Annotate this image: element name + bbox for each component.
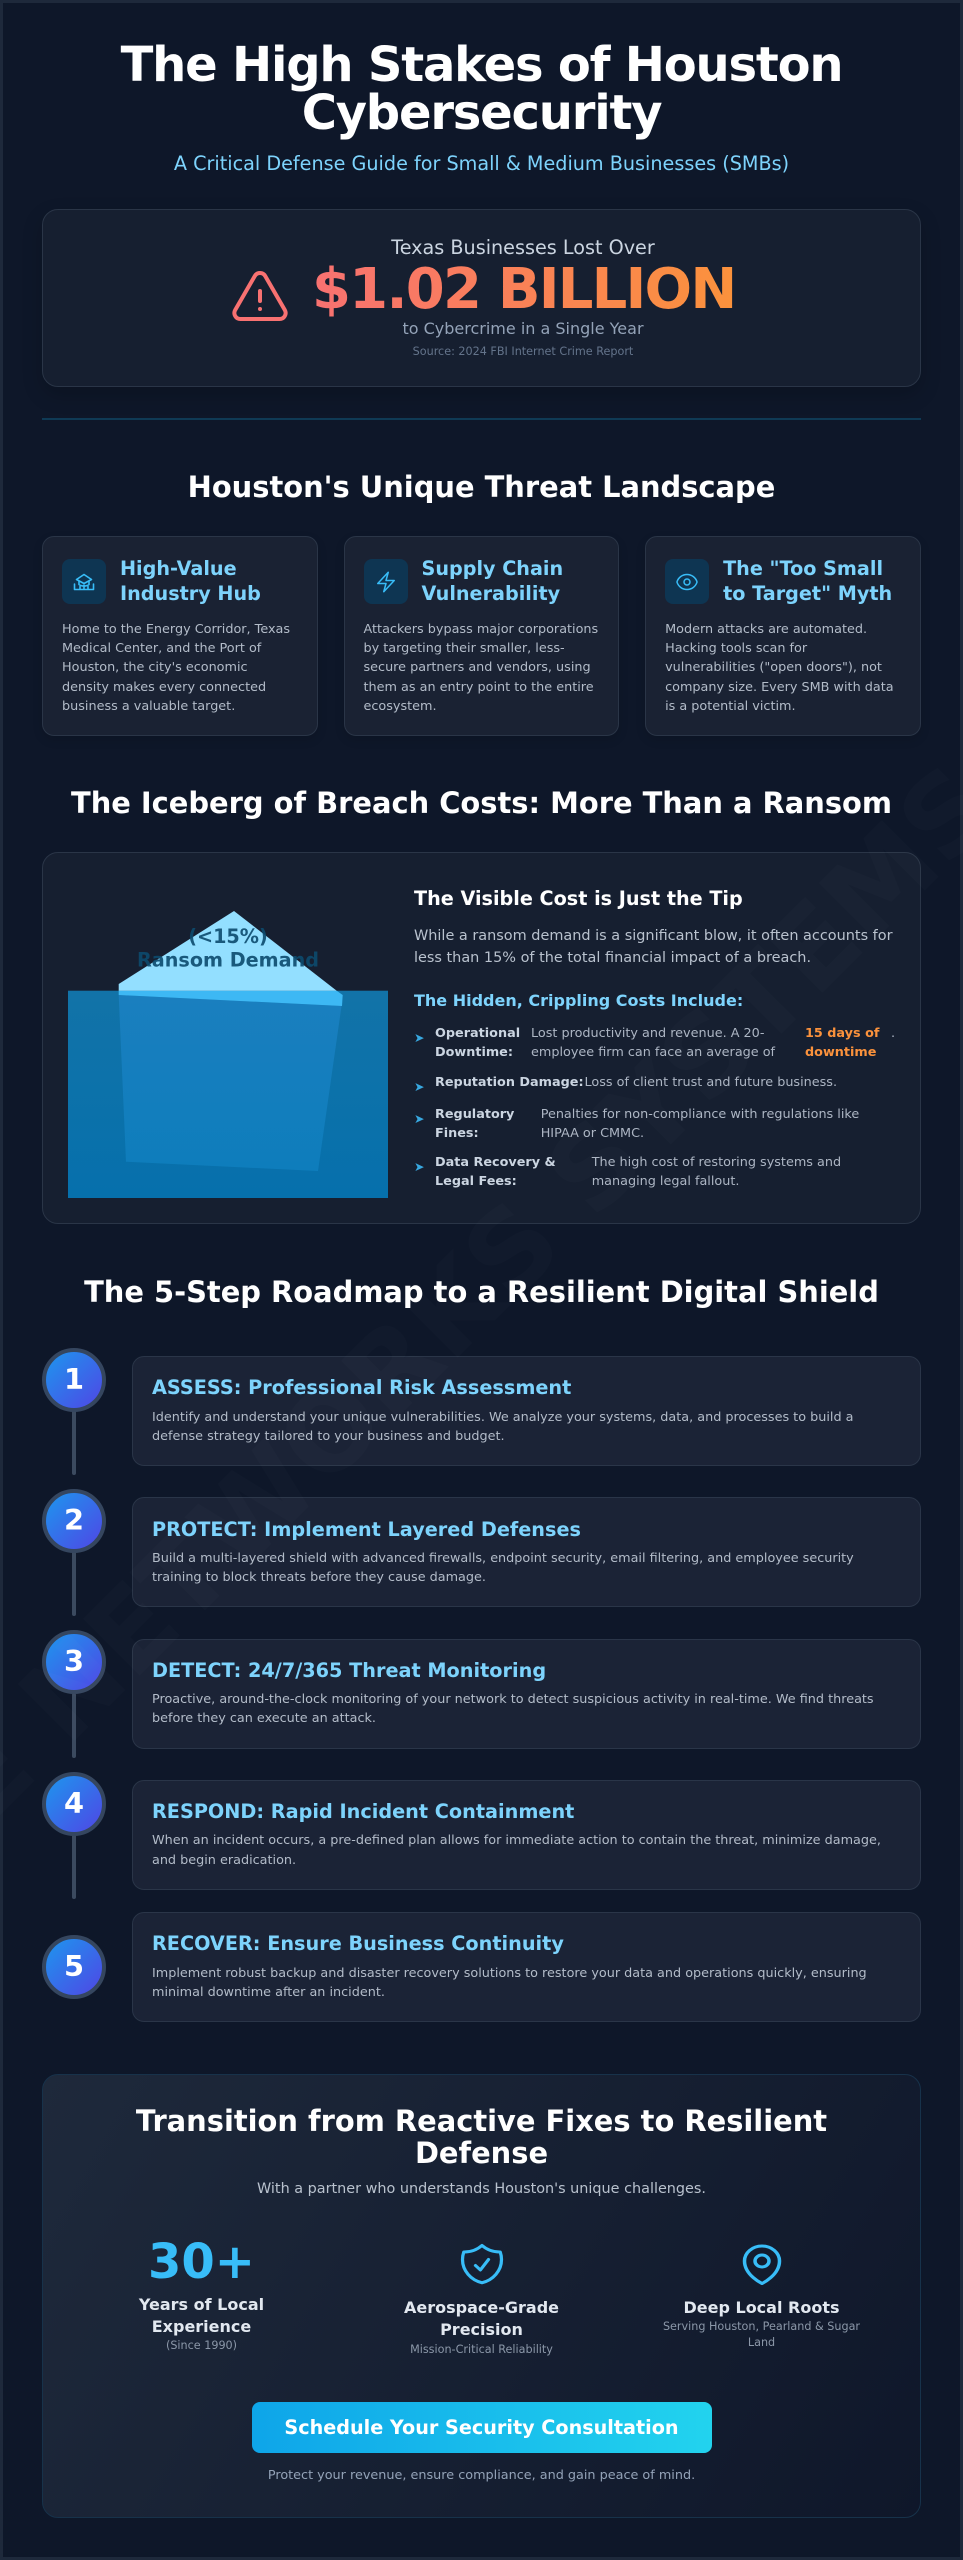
step 3 marker xyxy=(42,1630,106,1694)
card text: is a potential victim. xyxy=(665,699,796,714)
list item: regulatory fines xyxy=(414,1107,859,1141)
list item: operational downtime: downtime xyxy=(805,1045,876,1060)
list item: reputation damage xyxy=(414,1075,837,1094)
card title: to Target" Myth xyxy=(723,582,892,605)
list item: operational downtime: Downtime: xyxy=(435,1045,513,1060)
text: visible cost explanation: less than 15% of the total financial impact of a breach. xyxy=(414,950,811,966)
list item: regulatory fines: HIPAA or CMMC. xyxy=(541,1126,644,1141)
step 3 text xyxy=(152,1692,874,1726)
chart: iceberg diagram: Ransom Demand xyxy=(137,949,319,972)
card title: The "Too Small xyxy=(723,557,883,580)
list item: reputation damage: Loss of client trust and future business. xyxy=(584,1075,837,1090)
CTA heading xyxy=(136,2104,827,2170)
list item: data recovery: Legal Fees: xyxy=(435,1174,517,1189)
card text: Hacking tools scan for xyxy=(665,641,807,656)
step 5 card xyxy=(132,1912,921,2022)
list item: operational downtime: employee firm can face an average of xyxy=(531,1045,775,1060)
step 1 card xyxy=(132,1356,921,1466)
note: Mission-Critical Reliability xyxy=(410,2343,553,2356)
chart: iceberg diagram: (<15%) xyxy=(188,925,268,948)
step 2 text xyxy=(152,1551,854,1585)
card text: Attackers bypass major corporations xyxy=(364,622,598,637)
list item: operational downtime: 15 days of xyxy=(805,1026,879,1041)
step 5 marker: 5 xyxy=(64,1949,84,1983)
card text: company size. Every SMB with data xyxy=(665,680,894,695)
step 1 title: ASSESS: Professional Risk Assessment xyxy=(152,1376,571,1399)
panel: call to action xyxy=(42,2074,921,2518)
step 5 text xyxy=(152,1966,867,2000)
card text: secure partners and vendors, using xyxy=(364,660,591,675)
button: schedule consultation: Schedule Your Security Consultation xyxy=(284,2416,679,2439)
step 4 text xyxy=(152,1833,881,1868)
step 2 card xyxy=(132,1497,921,1607)
card text: ecosystem. xyxy=(364,699,437,714)
icon: bolt xyxy=(364,559,408,604)
stat caption: to Cybercrime in a Single Year xyxy=(402,318,644,338)
card title: High-Value xyxy=(120,557,237,580)
list item: data recovery: ➤ xyxy=(414,1159,424,1174)
list item: operational downtime: . xyxy=(891,1026,895,1041)
panel: too small to target myth xyxy=(645,536,921,736)
heading: iceberg: The Iceberg of Breach Costs: More Than a Ransom xyxy=(71,786,892,820)
title: The High Stakes of Houston xyxy=(121,37,842,93)
list item: data recovery: The high cost of restoring systems and xyxy=(592,1155,841,1170)
card title: Vulnerability xyxy=(422,582,560,605)
subheading: visible cost: The Visible Cost is Just the Tip xyxy=(414,887,743,910)
label xyxy=(138,2294,264,2336)
icon: map pin xyxy=(742,2244,782,2285)
label: Years of Local xyxy=(139,2294,264,2314)
list item: reputation damage: Reputation Damage: xyxy=(435,1075,584,1090)
button: schedule consultation xyxy=(252,2402,712,2453)
step 4 marker: 4 xyxy=(64,1786,84,1820)
card text: vulnerabilities ("open doors"), not xyxy=(665,660,882,675)
card title xyxy=(120,557,261,605)
list item: reputation damage: ➤ xyxy=(414,1079,424,1094)
step 1 marker xyxy=(42,1348,106,1412)
list item: regulatory fines: Regulatory xyxy=(435,1107,514,1122)
card text: by targeting their smaller, less- xyxy=(364,641,565,656)
icon: eye xyxy=(665,559,709,604)
card text: Modern attacks are automated. xyxy=(665,622,867,637)
list item: data recovery: Data Recovery & xyxy=(435,1155,556,1170)
label: Experience xyxy=(152,2316,251,2336)
text: visible cost explanation: While a ransom demand is a significant blow, it often accounts for xyxy=(414,928,893,944)
panel: headline statistic xyxy=(42,209,921,387)
step 1 marker: 1 xyxy=(64,1362,84,1396)
step 1 text: defense strategy tailored to your business and budget. xyxy=(152,1429,505,1444)
heading: threat landscape: Houston's Unique Threat Landscape xyxy=(188,470,775,504)
icon: warning triangle xyxy=(232,271,288,321)
closing line: Protect your revenue, ensure compliance, and gain peace of mind. xyxy=(268,2468,695,2483)
CTA subheading: With a partner who understands Houston's unique challenges. xyxy=(257,2180,706,2196)
heading: roadmap: The 5-Step Roadmap to a Resilient Digital Shield xyxy=(84,1275,879,1309)
card title xyxy=(723,557,892,605)
step 2 marker xyxy=(42,1489,106,1553)
panel: supply chain vulnerability xyxy=(344,536,619,736)
big number: $1.02 BILLION xyxy=(312,257,735,322)
card text xyxy=(665,622,894,714)
step 5 marker xyxy=(42,1935,106,1999)
step 2 text: training to block threats before they cause damage. xyxy=(152,1570,486,1585)
text: visible cost explanation xyxy=(414,928,893,966)
list item: operational downtime: ➤ xyxy=(414,1030,424,1045)
label xyxy=(404,2298,559,2338)
card text: Home to the Energy Corridor, Texas xyxy=(62,622,290,637)
step 4 card xyxy=(132,1780,921,1890)
card text: density makes every connected xyxy=(62,680,266,695)
step 3 text: before they can execute an attack. xyxy=(152,1711,376,1726)
card title: Industry Hub xyxy=(120,582,261,605)
card text: business a valuable target. xyxy=(62,699,235,714)
list item: regulatory fines: ➤ xyxy=(414,1111,424,1126)
step 3 marker: 3 xyxy=(64,1644,84,1678)
list item: data recovery xyxy=(414,1155,841,1189)
step 3 title: DETECT: 24/7/365 Threat Monitoring xyxy=(152,1659,546,1682)
number: 30+ xyxy=(148,2234,255,2290)
step 4 marker xyxy=(42,1772,106,1836)
note: (Since 1990) xyxy=(166,2339,237,2352)
card text xyxy=(364,622,598,714)
subtitle: A Critical Defense Guide for Small & Medium Businesses (SMBs) xyxy=(174,152,789,175)
label: Aerospace-Grade xyxy=(404,2298,559,2316)
CTA heading: Defense xyxy=(415,2136,548,2170)
icon: shield check xyxy=(460,2244,504,2284)
step 5 text: minimal downtime after an incident. xyxy=(152,1985,385,2000)
step 2 text: Build a multi-layered shield with advanced firewalls, endpoint security, email filtering, and employee security xyxy=(152,1551,854,1566)
step 5 title: RECOVER: Ensure Business Continuity xyxy=(152,1932,564,1955)
card text: Houston, the city's economic xyxy=(62,660,248,675)
list item: operational downtime xyxy=(414,1026,895,1060)
stat: deep local roots xyxy=(663,2244,860,2349)
note: Land xyxy=(748,2336,775,2349)
step 4 title: RESPOND: Rapid Incident Containment xyxy=(152,1800,574,1823)
CTA heading: Transition from Reactive Fixes to Resilient xyxy=(136,2104,827,2138)
stat: aerospace-grade precision xyxy=(404,2244,559,2356)
step 3 text: Proactive, around-the-clock monitoring of your network to detect suspicious activity in real-time. We find threats xyxy=(152,1692,874,1707)
list item: operational downtime: Lost productivity and revenue. A 20- xyxy=(531,1026,764,1041)
label: Deep Local Roots xyxy=(683,2298,840,2316)
list item: data recovery: managing legal fallout. xyxy=(592,1174,739,1189)
card title xyxy=(422,557,563,605)
step 4 text: When an incident occurs, a pre-defined plan allows for immediate action to contain the threat, minimize damage, xyxy=(152,1833,881,1848)
step 3 card xyxy=(132,1639,921,1749)
card text: Medical Center, and the Port of xyxy=(62,641,261,656)
title: Cybersecurity xyxy=(302,85,661,141)
label: Precision xyxy=(440,2320,523,2338)
chart: iceberg diagram xyxy=(68,911,388,1198)
step 2 title: PROTECT: Implement Layered Defenses xyxy=(152,1518,581,1541)
stat source: Source: 2024 FBI Internet Crime Report xyxy=(413,345,633,358)
panel: high-value industry hub xyxy=(42,536,318,736)
stat: years of experience xyxy=(138,2234,264,2352)
list item: regulatory fines: Fines: xyxy=(435,1126,479,1141)
stat intro text: Texas Businesses Lost Over xyxy=(391,236,655,259)
title xyxy=(120,37,842,141)
step 1 text: Identify and understand your unique vulnerabilities. We analyze your systems, data, and processes to build a xyxy=(152,1410,853,1425)
note: Serving Houston, Pearland & Sugar xyxy=(663,2320,860,2333)
subheading: hidden costs: The Hidden, Crippling Costs Include: xyxy=(414,990,743,1010)
step 4 text: and begin eradication. xyxy=(152,1853,296,1868)
card text xyxy=(62,622,290,714)
step 5 text: Implement robust backup and disaster recovery solutions to restore your data and operations quickly, ensuring xyxy=(152,1966,867,1981)
step 1 text xyxy=(152,1410,853,1444)
icon: industry hub xyxy=(62,559,106,604)
card text: them as an entry point to the entire xyxy=(364,680,594,695)
list item: operational downtime: Operational xyxy=(435,1026,520,1041)
panel: iceberg of breach costs xyxy=(42,852,921,1224)
card title: Supply Chain xyxy=(422,557,563,580)
note xyxy=(663,2320,860,2349)
list item: regulatory fines: Penalties for non-compliance with regulations like xyxy=(541,1107,859,1122)
step 2 marker: 2 xyxy=(64,1503,84,1537)
